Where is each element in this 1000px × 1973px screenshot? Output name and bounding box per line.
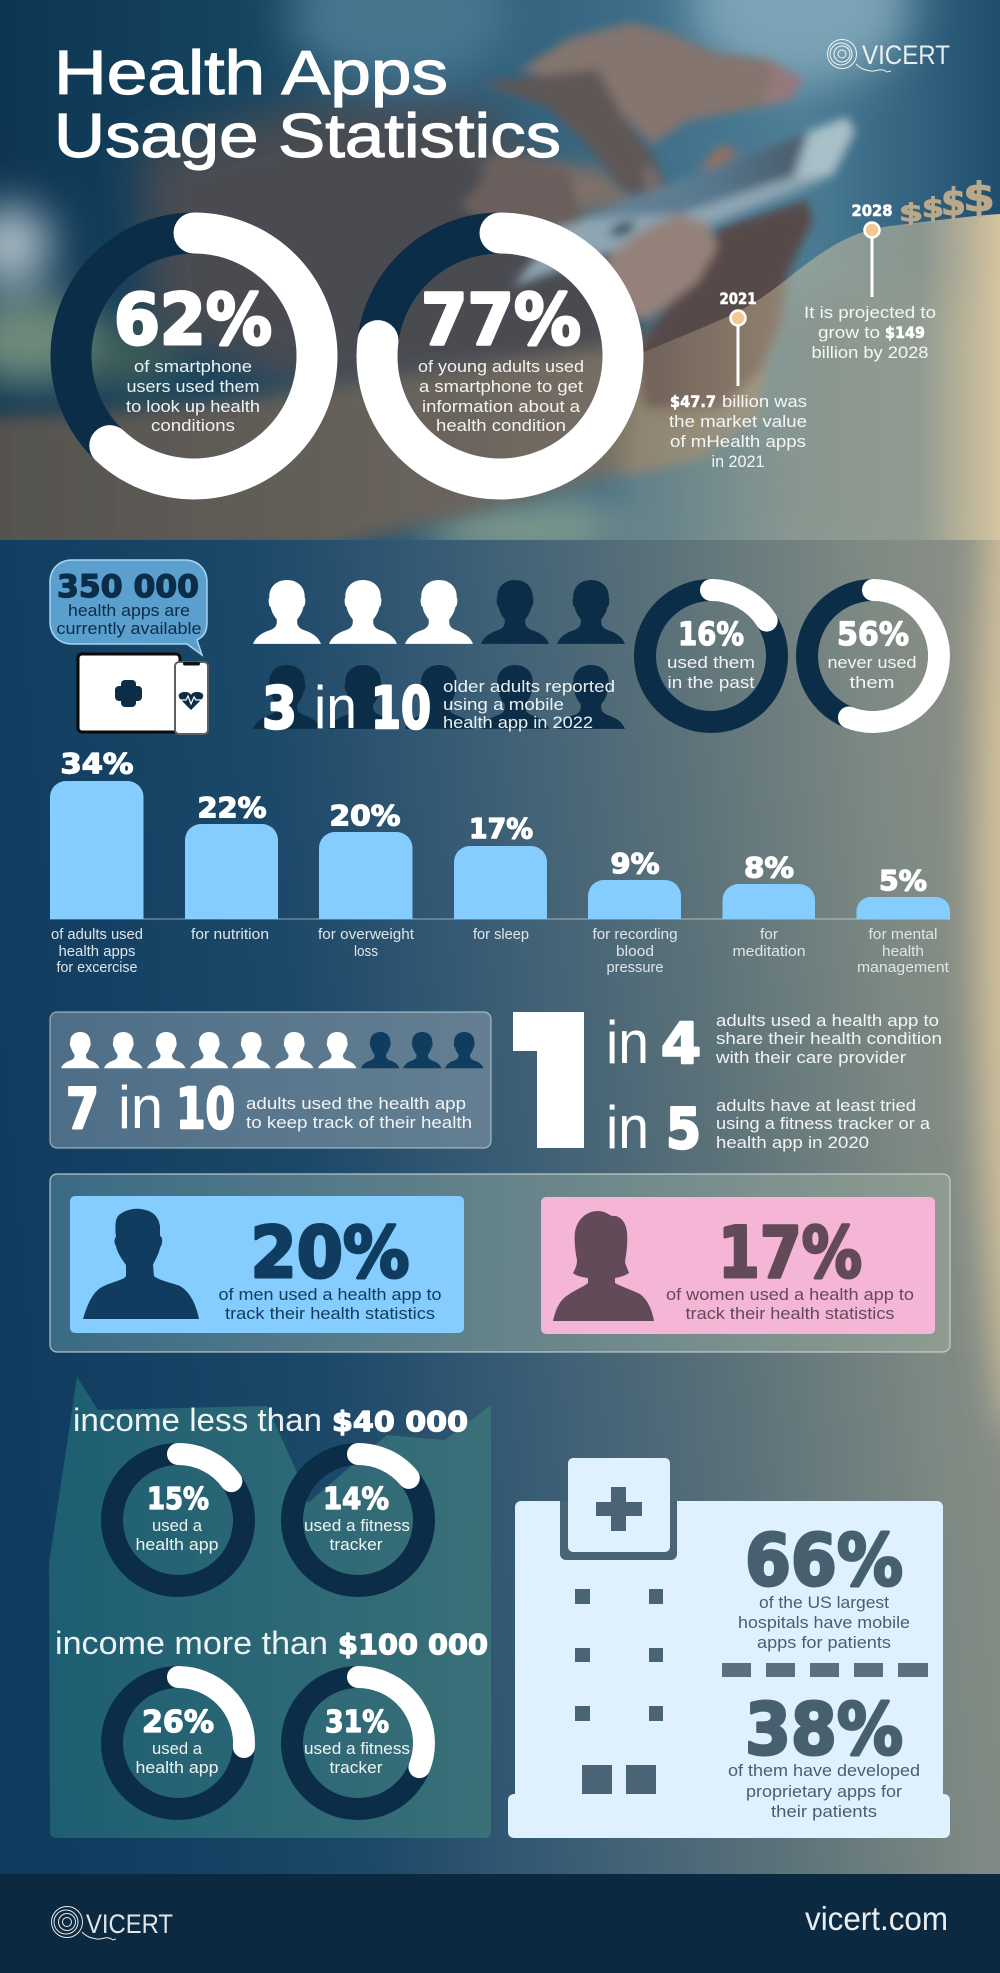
bar: mental health 5%: 5% <box>879 864 927 897</box>
logo: Vicert footer <box>52 1906 173 1940</box>
stat: 66%: of the US largest <box>759 1593 889 1612</box>
bar: nutrition 22% <box>185 791 278 943</box>
bar: meditation 8%: 8% <box>744 851 794 884</box>
donut: 26% health app <box>112 1677 244 1809</box>
panel: income comparison <box>49 1377 491 1838</box>
bar: blood pressure 9%: pressure <box>606 960 664 976</box>
callout: 2028 projection: 2028 <box>852 201 892 220</box>
bar: nutrition 22%: 22% <box>198 791 266 824</box>
bar: overweight loss 20%: for overweight <box>318 927 414 943</box>
callout: 2028 projection: billion by 2028 <box>812 343 928 362</box>
donut: 77%: 77% <box>421 279 581 361</box>
stat: 1 in 4: 4 <box>661 1012 701 1077</box>
icon: man silhouette <box>83 1209 199 1319</box>
card: women 17%: of women used a health app to <box>666 1285 914 1304</box>
hero photo: blurred hand holding a phone <box>0 0 1000 560</box>
donut: 56%: them <box>850 673 894 692</box>
donut: 77%: a smartphone to get <box>419 377 583 396</box>
donut: 62% <box>71 233 317 479</box>
donut: 31% fitness tracker <box>292 1677 424 1809</box>
stat: 1 in 4 <box>606 1009 942 1077</box>
speech bubble: 350 000 health apps: 350 000 <box>57 569 199 605</box>
callout: 2021 market value: 2021 <box>720 289 756 308</box>
bar: exercise 34%: health apps <box>58 944 136 960</box>
logo: Vicert footer: VICERT <box>86 1909 173 1939</box>
stat: 1 in 5: adults have at least tried <box>716 1096 916 1115</box>
panel: 7 in 10 <box>50 1012 491 1148</box>
callout: 2028 projection: It is projected to <box>804 303 936 322</box>
panel: gender comparison <box>50 1174 950 1352</box>
panel: 7 in 10: 10 <box>176 1077 235 1142</box>
callout: 2028 projection: $149 <box>885 323 925 342</box>
speech bubble: 350 000 health apps <box>50 560 207 655</box>
bar: overweight loss 20%: 20% <box>330 799 400 832</box>
stat: 1 in 5 <box>606 1094 931 1162</box>
card: women 17%: track their health statistics <box>686 1304 894 1323</box>
donut: 62%: 62% <box>114 279 272 361</box>
donut: 56%: 56% <box>837 615 909 653</box>
callout: 2021 market value: the market value <box>669 412 807 431</box>
title: Health Apps <box>54 39 448 108</box>
stat: 1 in 4: with their care provider <box>715 1048 906 1067</box>
bar: meditation 8% <box>722 851 815 960</box>
callout: 2028 projection: grow to <box>818 323 880 342</box>
bar: nutrition 22%: for nutrition <box>191 927 269 943</box>
large numeral 1: 1 <box>505 975 595 1208</box>
stat: 3 in 10: in <box>314 674 357 741</box>
heading: income more than $100 000 <box>55 1625 488 1661</box>
donut: 26% health app: health app <box>136 1758 218 1777</box>
people row: 7 of 10 <box>61 1032 484 1068</box>
stat: 3 in 10 <box>262 674 615 742</box>
stat: 3 in 10: using a mobile <box>443 695 564 714</box>
title <box>54 39 561 171</box>
heading: income less than $40 000 <box>73 1402 468 1438</box>
heading: income more than $100 000: income more than <box>55 1625 328 1661</box>
donut: 31% fitness tracker: 31% <box>325 1705 389 1740</box>
donut: 16%: 16% <box>678 615 744 653</box>
stat: 1 in 5: using a fitness tracker or a <box>716 1114 931 1133</box>
card: men 20%: 20% <box>250 1212 410 1294</box>
stat: 38% <box>728 1688 920 1821</box>
bar: mental health 5% <box>856 864 950 976</box>
donut: 14% fitness tracker: used a fitness <box>304 1516 410 1535</box>
bar: blood pressure 9% <box>588 847 681 976</box>
heading: income more than $100 000: $100 000 <box>338 1628 488 1661</box>
donut: 26% health app: used a <box>152 1739 203 1758</box>
speech bubble: 350 000 health apps: health apps are <box>68 601 190 620</box>
donut: 16%: used them <box>667 653 755 672</box>
hospital building shape <box>508 1458 950 1838</box>
bar: exercise 34% <box>50 747 144 976</box>
donut: 77% <box>377 233 623 479</box>
footer bar <box>0 1874 1000 1973</box>
bar: blood pressure 9%: blood <box>616 944 654 960</box>
bar: meditation 8%: meditation <box>732 944 806 960</box>
icon: hospital cross <box>596 1487 642 1531</box>
donut: 77%: of young adults used <box>418 357 584 376</box>
donut: 14% fitness tracker: 14% <box>323 1482 389 1517</box>
stat: 38%: 38% <box>745 1688 903 1771</box>
stat: 38%: their patients <box>771 1802 877 1821</box>
stat: 3 in 10: older adults reported <box>443 677 615 696</box>
callout: 2021 market value: billion was <box>722 392 807 411</box>
donut: 56%: never used <box>828 653 916 672</box>
stat: 1 in 5: in <box>606 1094 649 1161</box>
bar: mental health 5%: for mental <box>868 927 938 943</box>
icon: phone with heart <box>175 662 208 734</box>
bar: exercise 34%: 34% <box>60 747 134 780</box>
bar: exercise 34%: of adults used <box>51 927 143 943</box>
panel: 7 in 10: in <box>118 1074 163 1141</box>
donut: 16% <box>645 590 777 722</box>
divider blocks <box>722 1663 928 1677</box>
bar: sleep 17%: 17% <box>469 812 533 845</box>
donut: 15% health app <box>112 1454 244 1586</box>
donut: 14% fitness tracker <box>292 1454 424 1586</box>
panel: 7 in 10: to keep track of their health <box>246 1113 472 1132</box>
dollar signs <box>899 175 995 227</box>
title: Usage Statistics <box>54 102 561 171</box>
callout: 2021 market value: in 2021 <box>712 452 764 471</box>
people row: 3 in 10 bottom <box>253 665 625 729</box>
stat: 66%: 66% <box>745 1519 903 1602</box>
stat: 66% <box>738 1519 910 1652</box>
donut: 26% health app: 26% <box>142 1705 214 1740</box>
callout: 2021 market value: $47.7 <box>670 392 716 411</box>
donut: 15% health app: health app <box>136 1535 218 1554</box>
stat: 3 in 10: 10 <box>371 674 431 742</box>
stat: 1 in 4: in <box>606 1009 649 1076</box>
stat: 66%: hospitals have mobile <box>738 1613 910 1632</box>
people row: 3 in 10 top <box>253 580 625 644</box>
callout: 2028 projection <box>804 201 936 362</box>
tan glow on right edge <box>976 320 1000 1440</box>
dollar signs: $ <box>899 199 923 227</box>
icon: tablet with medical cross <box>78 654 180 732</box>
stat: 38%: proprietary apps for <box>746 1782 902 1801</box>
bar: mental health 5%: management <box>857 960 949 976</box>
stat: 1 in 5: health app in 2020 <box>716 1133 869 1152</box>
donut: 16%: in the past <box>668 673 755 692</box>
card: women 17% <box>541 1197 935 1334</box>
heading: income less than $40 000: income less than <box>73 1402 322 1438</box>
stat: 3 in 10: health app in 2022 <box>443 713 593 732</box>
bar: overweight loss 20%: loss <box>354 944 378 960</box>
bar: blood pressure 9%: 9% <box>610 847 660 880</box>
speech bubble: 350 000 health apps: currently available <box>56 619 202 638</box>
bar: meditation 8%: for <box>760 927 778 943</box>
panel: 7 in 10: adults used the health app <box>246 1094 466 1113</box>
logo: Vicert top <box>828 40 950 72</box>
donut: 31% fitness tracker: tracker <box>330 1758 383 1777</box>
website address: vicert.com <box>805 1900 948 1937</box>
bar: sleep 17%: for sleep <box>473 927 529 943</box>
bar: mental health 5%: health <box>882 944 924 960</box>
donut: 15% health app: 15% <box>147 1482 209 1517</box>
bar: exercise 34%: for excercise <box>56 960 138 976</box>
card: men 20% <box>70 1196 464 1333</box>
bar: blood pressure 9%: for recording <box>592 927 678 943</box>
bar: overweight loss 20% <box>318 799 414 960</box>
card: men 20%: of men used a health app to <box>218 1285 442 1304</box>
card: men 20%: track their health statistics <box>225 1304 435 1323</box>
panel: hospital <box>508 1458 950 1838</box>
bar chart <box>50 747 950 976</box>
icon: woman silhouette <box>553 1211 654 1321</box>
dollar signs: $ <box>963 175 995 221</box>
card: women 17%: 17% <box>718 1212 862 1294</box>
stat: 66%: apps for patients <box>757 1633 891 1652</box>
stat: 38%: of them have developed <box>728 1761 920 1780</box>
stat: 1 in 4: share their health condition <box>716 1029 942 1048</box>
donut: 62%: to look up health <box>126 397 260 416</box>
stat: 1 in 5: 5 <box>666 1097 701 1162</box>
stat: 3 in 10: 3 <box>262 674 297 742</box>
donut: 15% health app: used a <box>152 1516 203 1535</box>
donut: 62%: users used them <box>126 377 260 396</box>
logo: Vicert top: VICERT <box>862 40 950 70</box>
callout: 2021 market value <box>669 289 807 471</box>
donut: 62%: of smartphone <box>134 357 252 376</box>
heading: income less than $40 000: $40 000 <box>332 1405 468 1438</box>
bar: sleep 17% <box>454 812 547 943</box>
donut: 14% fitness tracker: tracker <box>330 1535 383 1554</box>
donut: 62%: conditions <box>151 416 235 435</box>
stat: 1 in 4: adults used a health app to <box>716 1011 939 1030</box>
market growth area curve <box>600 214 1000 540</box>
dollar signs: $ <box>922 193 944 224</box>
dollar signs: $ <box>941 181 966 224</box>
donut: 77%: information about a <box>422 397 581 416</box>
callout: 2021 market value: of mHealth apps <box>670 432 806 451</box>
panel: 7 in 10: 7 <box>66 1077 99 1142</box>
hospital windows and doors <box>575 1589 663 1794</box>
donut: 31% fitness tracker: used a fitness <box>304 1739 410 1758</box>
donut: 77%: health condition <box>436 416 566 435</box>
donut: 56% <box>807 590 939 722</box>
